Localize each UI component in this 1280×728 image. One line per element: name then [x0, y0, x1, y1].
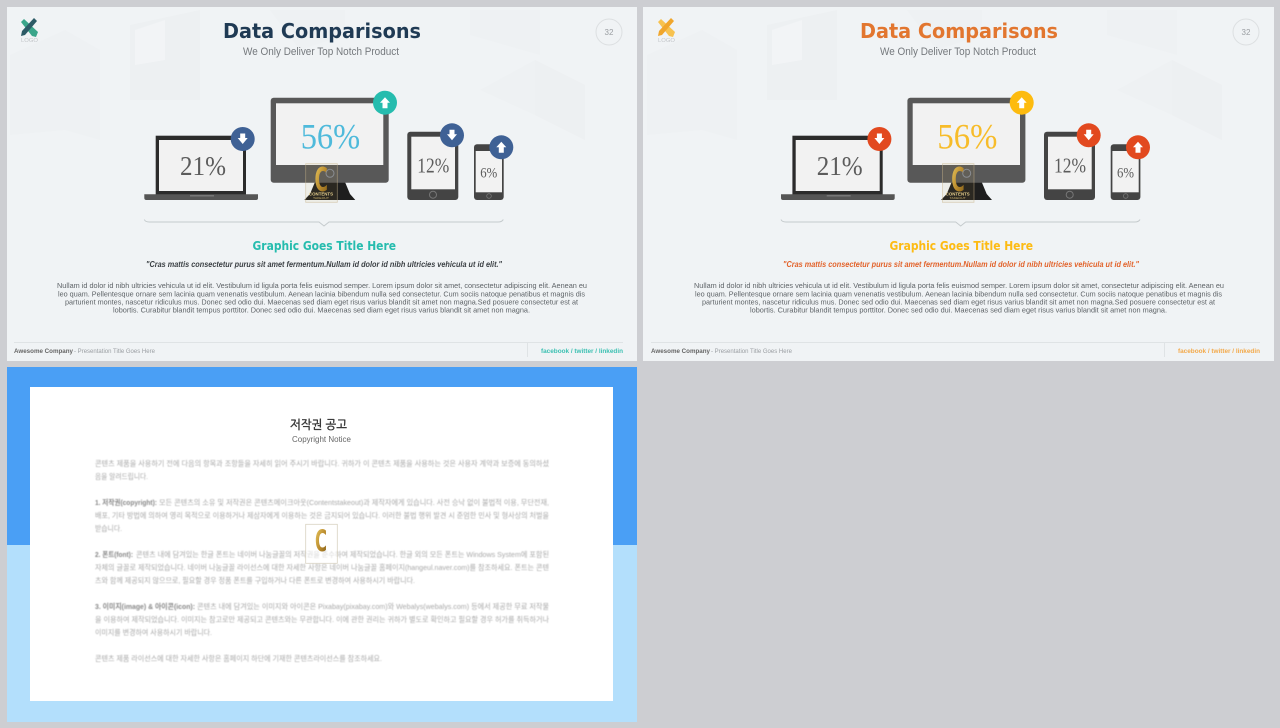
watermark: CONTENTS [309, 192, 333, 196]
notice text: 콘텐츠 내에 담겨있는 이미지와 아이콘은 Pixabay(pixabay.com)와 Webalys(webalys.com) 등에서 제공한 무료 저작물 [197, 601, 549, 611]
icon: down arrow badge [440, 123, 464, 147]
logo: LOGO [658, 38, 676, 44]
logo [658, 18, 676, 44]
watermark: TAKEOUT [950, 196, 966, 200]
watermark: C [315, 524, 327, 558]
device: laptop 21%: 21% [817, 151, 863, 181]
footer [14, 342, 623, 357]
device: monitor 56% [271, 91, 397, 200]
notice text: 음을 알려드립니다. [95, 471, 148, 481]
notice text: 을 이용하여 제작되었습니다. 이미지는 참고로만 제공되고 콘텐츠와는 무관합니다. 이에 관한 권리는 귀하가 별도로 확인하고 필요할 경우 허가를 취득하거나 [95, 614, 549, 624]
device: phone 6% [474, 135, 513, 200]
notice text: 3. 이미지(image) & 아이콘(icon): [95, 601, 195, 611]
watermark: C [951, 160, 965, 199]
device: laptop 21% [781, 127, 895, 200]
notice text: 자체의 글꼴로 제작되었습니다. 네이버 나눔글꼴 라이선스에 대한 자세한 사항은 네이버 나눔글꼴 홈페이지(hangeul.naver.com)를 참조하세요. 폰트는 콘텐 [95, 562, 549, 572]
watermark [306, 160, 337, 202]
quote: "Cras mattis consectetur purus sit amet fermentum.Nullam id dolor id nibh ultricies vehicula ut id elit." [146, 259, 503, 269]
footer: facebook / twitter / linkedin [1178, 349, 1260, 355]
device: tablet 12%: 12% [417, 153, 449, 177]
footer [651, 342, 1260, 357]
body text: lobortis. Curabitur blandit tempus porttitor. Donec sed odio dui. Maecenas sed diam eget risus varius blandit sit amet non magna. [113, 306, 530, 314]
notice text: 1. 저작권(copyright): [95, 497, 157, 507]
watermark: CONTENTS [946, 192, 970, 196]
notice heading: 저작권 공고 [290, 418, 347, 432]
icon: up arrow badge [489, 135, 513, 159]
brace [781, 220, 1140, 226]
device: phone 6%: 6% [480, 165, 497, 181]
page number [1233, 19, 1259, 45]
device: phone 6%: 6% [1117, 165, 1134, 181]
logo: LOGO [21, 38, 39, 44]
icon: down arrow badge [1077, 123, 1101, 147]
panel: orange slide data comparisons [643, 7, 1274, 361]
footer: Awesome Company [14, 349, 74, 355]
notice text: 콘텐츠 내에 담겨있는 한글 폰트는 네이버 나눔글꼴의 저작권을 준수하여 제작되었습니다. 한글 외의 모든 폰트는 Windows System에 포함된 [136, 549, 549, 559]
device: laptop 21%: 21% [180, 151, 226, 181]
footer: - Presentation Title Goes Here [711, 349, 793, 355]
footer: facebook / twitter / linkedin [541, 349, 623, 355]
subtitle: We Only Deliver Top Notch Product [880, 46, 1036, 58]
device: tablet 12%: 12% [1054, 153, 1086, 177]
watermark [306, 524, 337, 563]
device: monitor 56%: 56% [937, 116, 997, 156]
icon: up arrow badge [1010, 91, 1034, 115]
body text: leo quam. Pellentesque ornare sem lacinia quam venenatis vestibulum. Aenean lacinia bibendum nulla sed consectetur. Cum sociis natoque penatibus et magnis dis [58, 290, 585, 298]
logo [21, 18, 39, 44]
chart heading: Graphic Goes Title Here [252, 238, 396, 253]
icon: up arrow badge [373, 91, 397, 115]
device: monitor 56%: 56% [301, 116, 360, 156]
title: Data Comparisons [860, 19, 1058, 43]
device: tablet 12% [407, 123, 464, 200]
panel: blue slide data comparisons [7, 7, 637, 361]
notice text: 모든 콘텐츠의 소유 및 저작권은 콘텐츠메이크아웃(Contentstakeout)과 제작자에게 있습니다. 사전 승낙 없이 불법적 이용, 무단전재, [159, 497, 549, 507]
icon: down arrow badge [867, 127, 891, 151]
title: Data Comparisons [223, 19, 421, 43]
device: monitor 56% [907, 91, 1034, 200]
page number: 32 [605, 28, 614, 37]
notice text: 2. 폰트(font): [95, 550, 133, 559]
notice subheading: Copyright Notice [292, 434, 351, 444]
watermark: TAKEOUT [313, 196, 329, 200]
watermark [942, 160, 974, 202]
brace [144, 220, 503, 226]
body text [694, 281, 1224, 314]
body text: leo quam. Pellentesque ornare sem lacinia quam venenatis vestibulum. Aenean lacinia bibendum nulla sed consectetur. Cum sociis natoque penatibus et magnis dis [695, 290, 1222, 298]
quote: "Cras mattis consectetur purus sit amet fermentum.Nullam id dolor id nibh ultricies vehicula ut id elit." [783, 259, 1140, 269]
notice text: 콘텐츠 제품 라이선스에 대한 자세한 사항은 홈페이지 하단에 기재한 콘텐츠라이선스를 참조하세요. [95, 653, 382, 663]
body text: parturient montes, nascetur ridiculus mus. Donec sed odio dui. Maecenas sed diam eget risus varius blandit sit amet non magna.Sed posuere consectetur est at [65, 298, 579, 306]
watermark: C [314, 160, 328, 199]
page number: 32 [1242, 28, 1251, 37]
page number [596, 19, 622, 45]
icon: up arrow badge [1126, 135, 1150, 159]
device: phone 6% [1111, 135, 1150, 200]
notice text: 받습니다. [95, 523, 122, 533]
body text: Nullam id dolor id nibh ultricies vehicula ut id elit. Vestibulum id ligula porta felis euismod semper. Lorem ipsum dolor sit amet, consectetur adipiscing elit. Aenean eu [57, 281, 587, 290]
notice text [95, 458, 549, 663]
panel: copyright notice [7, 367, 637, 722]
icon: down arrow badge [231, 127, 255, 151]
chart heading: Graphic Goes Title Here [890, 238, 1033, 253]
body text: lobortis. Curabitur blandit tempus porttitor. Donec sed odio dui. Maecenas sed diam eget risus varius blandit sit amet non magna. [750, 306, 1167, 314]
notice text: 이미지를 변경하여 사용하시기 바랍니다. [95, 627, 212, 637]
subtitle: We Only Deliver Top Notch Product [243, 46, 399, 58]
body text [57, 281, 587, 314]
footer: Awesome Company [651, 349, 711, 355]
notice text: 츠와 함께 제공되지 않으므로, 필요할 경우 정품 폰트를 구입하거나 다른 폰트로 변경하여 사용하시기 바랍니다. [95, 575, 415, 585]
device: laptop 21% [144, 127, 258, 200]
footer: - Presentation Title Goes Here [74, 349, 156, 355]
notice text: 콘텐츠 제품을 사용하기 전에 다음의 항목과 조항들을 자세히 읽어 주시기 바랍니다. 귀하가 이 콘텐츠 제품을 사용하는 것은 사용자 계약과 보증에 동의하셨 [95, 458, 549, 468]
body text: parturient montes, nascetur ridiculus mus. Donec sed odio dui. Maecenas sed diam eget risus varius blandit sit amet non magna.Sed posuere consectetur est at [702, 298, 1216, 306]
device: tablet 12% [1044, 123, 1101, 200]
notice text: 배포, 기타 방법에 의하여 영리 목적으로 이용하거나 제삼자에게 이용하는 것은 금지되어 있습니다. 이러한 불법 행위 발견 시 준엄한 민사 및 형사상의 처벌을 [95, 510, 549, 520]
body text: Nullam id dolor id nibh ultricies vehicula ut id elit. Vestibulum id ligula porta felis euismod semper. Lorem ipsum dolor sit amet, consectetur adipiscing elit. Aenean eu [694, 281, 1224, 290]
